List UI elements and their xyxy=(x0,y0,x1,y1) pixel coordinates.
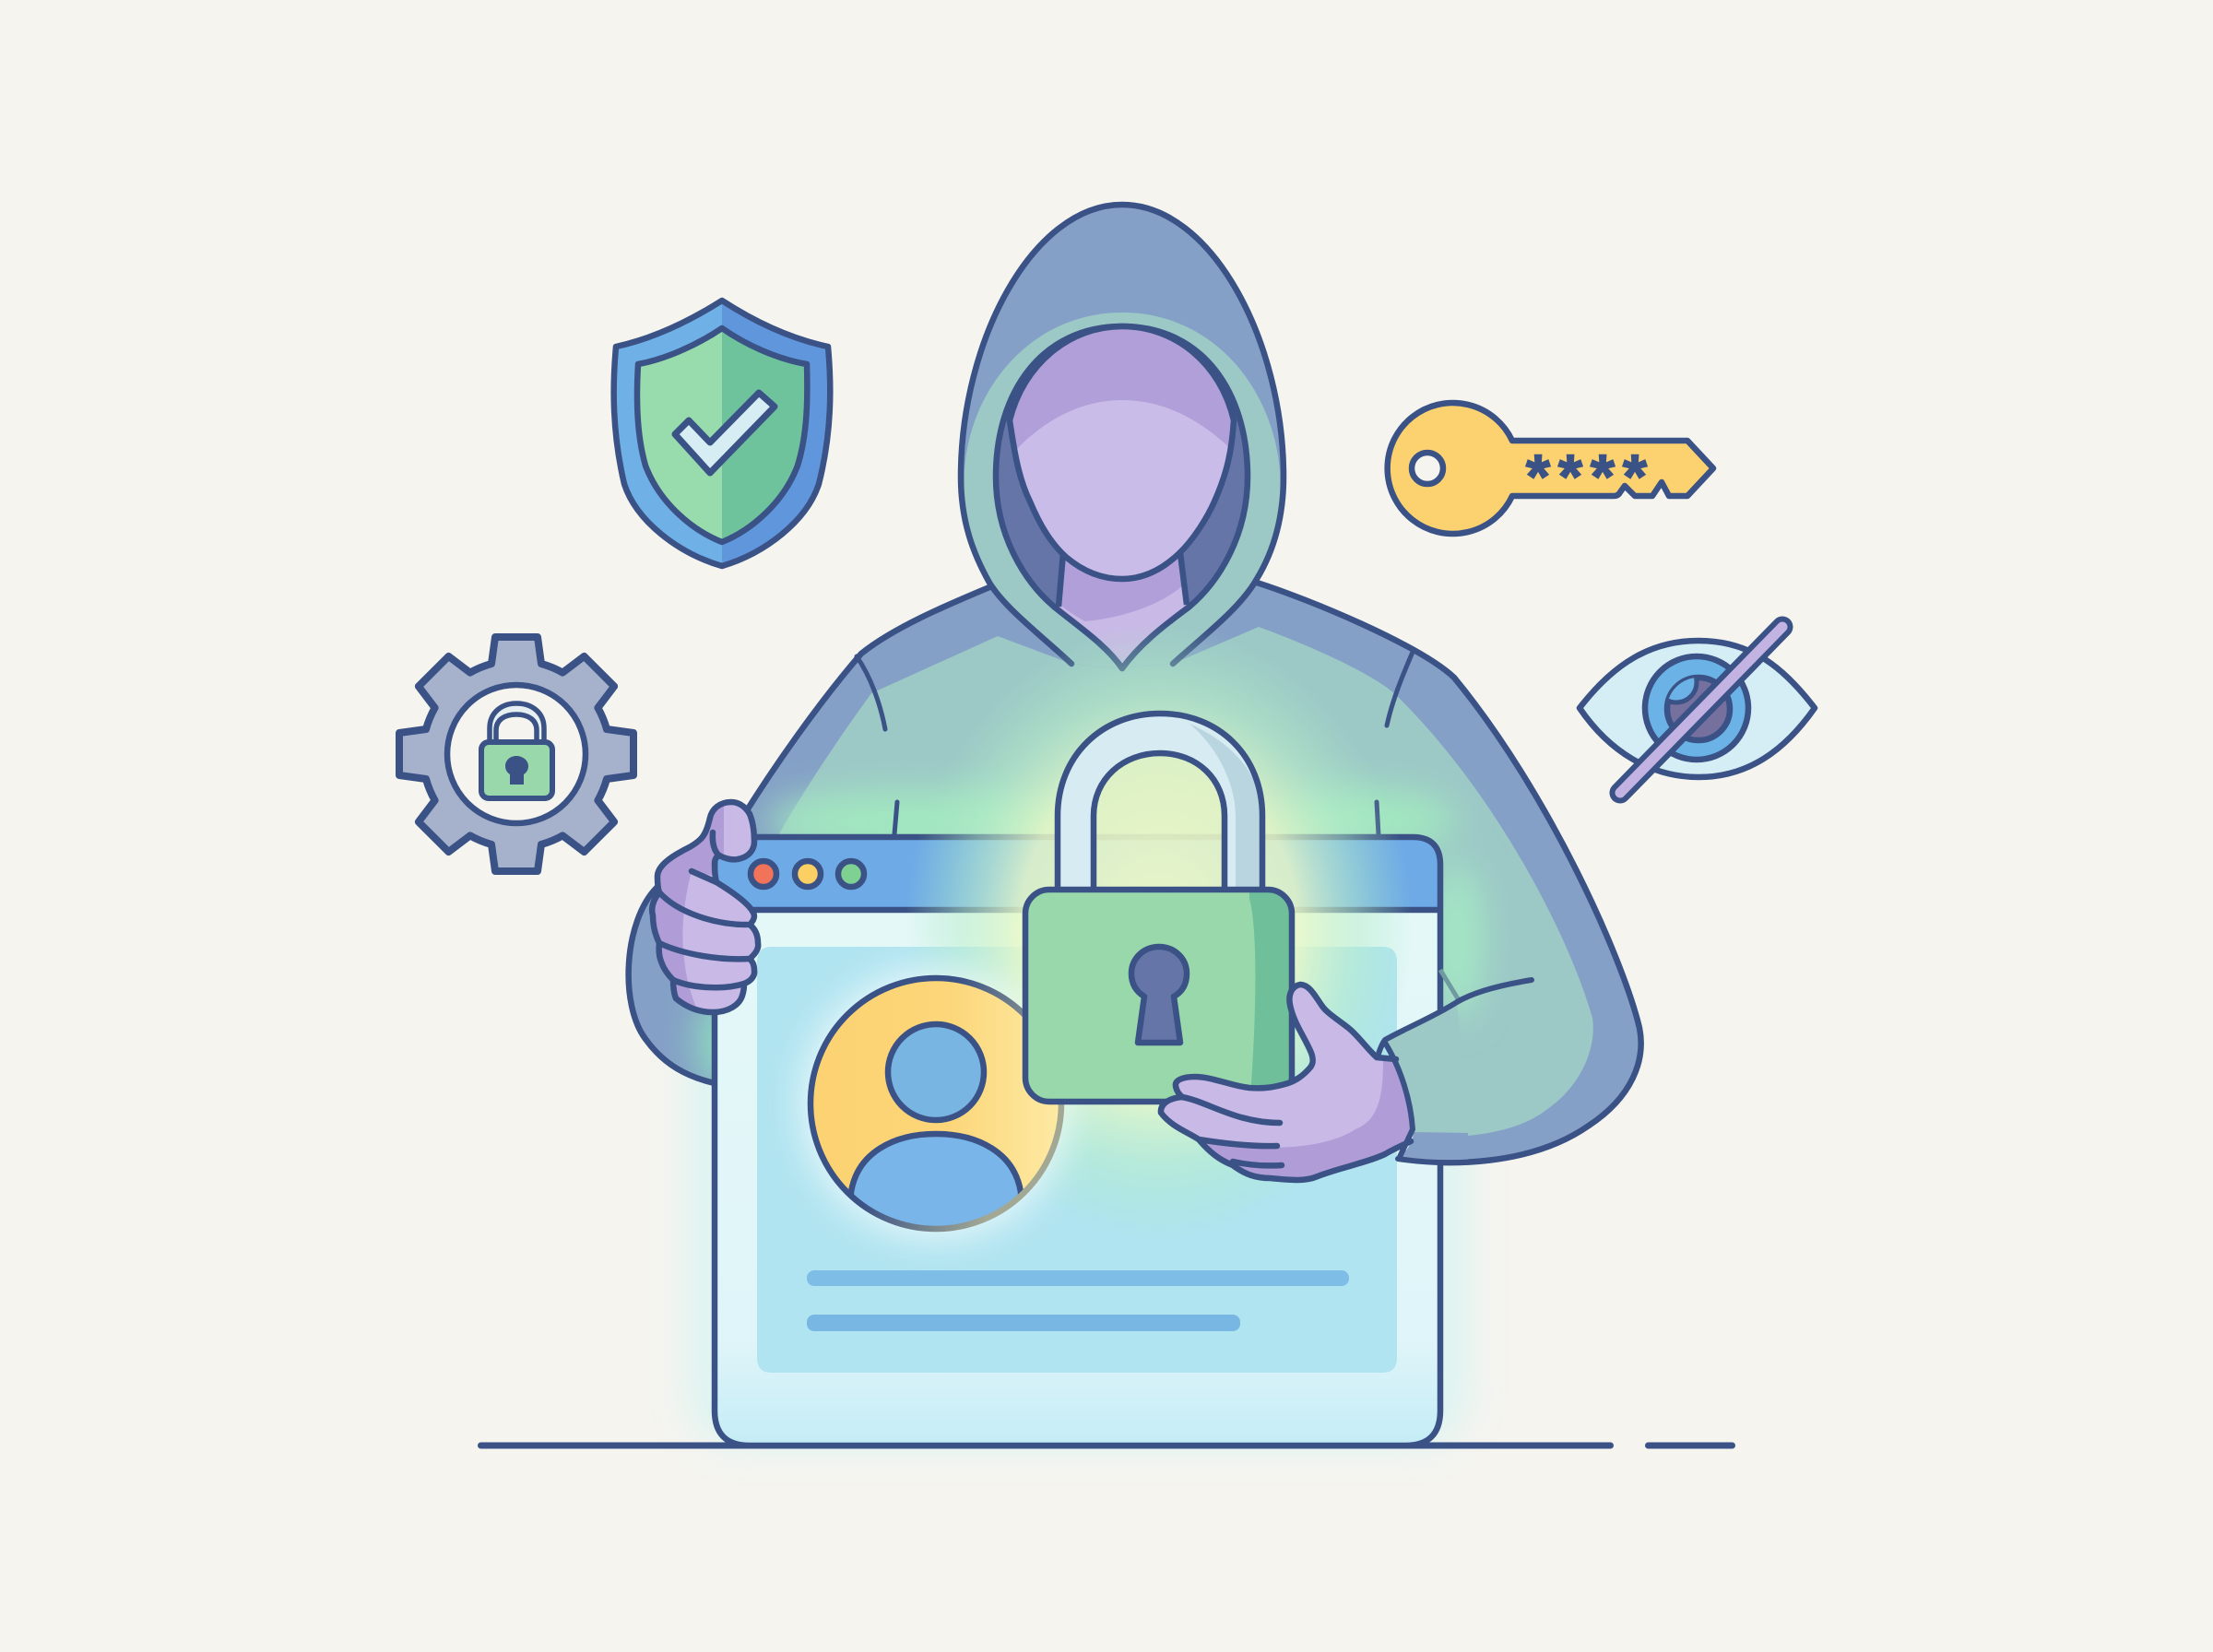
icon: security shield xyxy=(614,295,837,572)
avatar halo xyxy=(801,969,1071,1238)
lock body xyxy=(1025,890,1292,1102)
avatar xyxy=(811,978,1061,1235)
ground line xyxy=(478,1442,1735,1449)
content panel xyxy=(757,947,1397,1373)
face xyxy=(1010,326,1236,590)
hooded figure xyxy=(629,205,1641,1162)
small lock xyxy=(481,703,552,798)
right hand xyxy=(1161,980,1589,1189)
masked password: **** xyxy=(1526,442,1648,512)
padlock glow xyxy=(905,622,1413,1240)
window control dots xyxy=(751,861,864,887)
hood opening xyxy=(996,326,1248,668)
window outer glow xyxy=(710,922,1446,1424)
padlock xyxy=(1025,714,1300,1106)
left hand xyxy=(645,793,758,1019)
icon: settings gear with lock xyxy=(399,637,633,871)
keyhole xyxy=(1131,947,1187,1043)
hood xyxy=(959,205,1284,682)
neck xyxy=(1059,551,1187,667)
small diagonal fold line xyxy=(1440,970,1459,1000)
icon: crossed-out eye xyxy=(1580,627,1815,793)
shackle xyxy=(1058,714,1262,890)
sleeve cuff xyxy=(1378,980,1589,1162)
text line 2 xyxy=(807,1315,1240,1331)
check mark xyxy=(675,393,775,473)
icon: password key xyxy=(1388,403,1713,534)
hoodie body xyxy=(629,583,1641,1162)
browser window xyxy=(715,837,1459,1446)
text line 1 xyxy=(807,1270,1349,1286)
title bar xyxy=(715,837,1440,910)
sleeve in front of window xyxy=(1385,1002,1468,1161)
